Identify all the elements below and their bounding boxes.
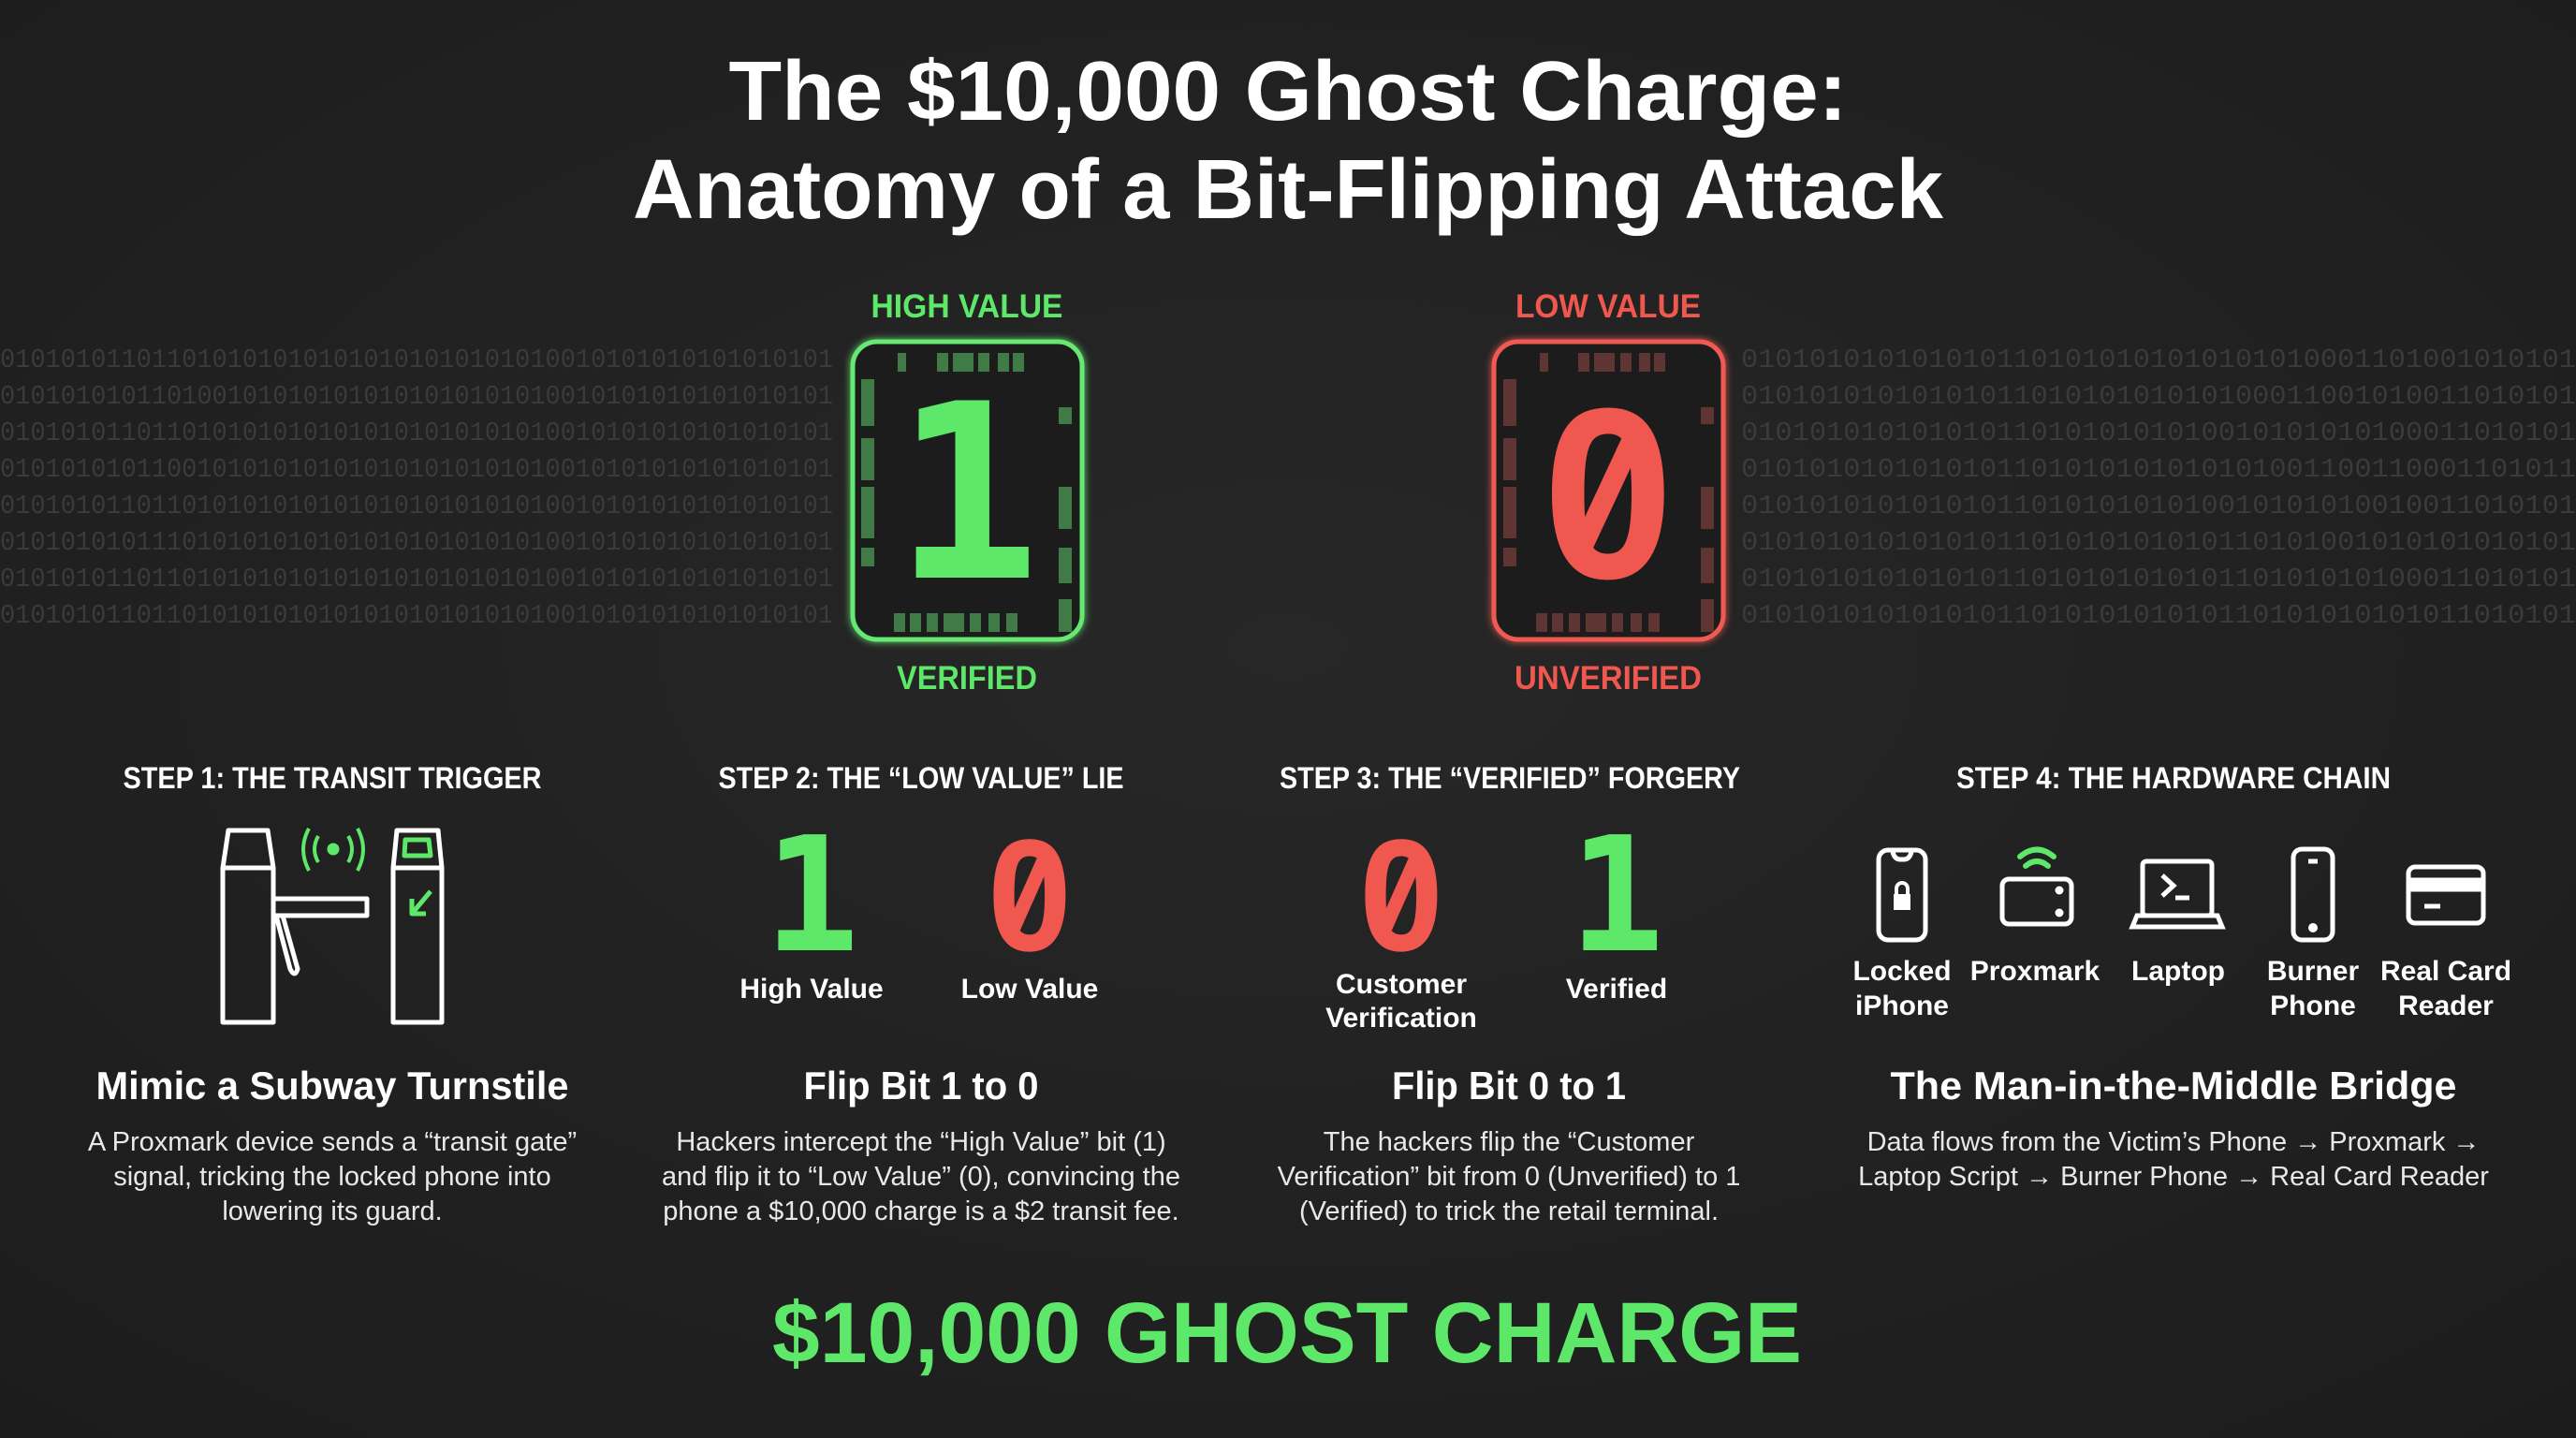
binary background right: 0101010101010101101010101010110101010100011010101 (1741, 564, 2576, 594)
panel: low value bit: LOW VALUE (1515, 288, 1701, 325)
body text: and flip it to “Low Value” (0), convincing the (662, 1162, 1180, 1192)
body text: Data flows from the Victim’s Phone → Proxmark → (1867, 1127, 2480, 1157)
body text: (Verified) to trick the retail terminal. (1299, 1196, 1719, 1226)
step 3 bits: 0 (1359, 807, 1443, 985)
body text: Hackers intercept the “High Value” bit (1) (676, 1127, 1166, 1157)
step headings: STEP 2: THE “LOW VALUE” LIE (719, 761, 1123, 795)
icon: turnstile (223, 829, 442, 1022)
panel: high value bit (853, 288, 1082, 697)
step 3 bits: Verification (1325, 1003, 1477, 1034)
binary background right: 0101010101010101101010101010101010001101001010101 (1741, 345, 2576, 375)
step 4 hardware chain icons (1852, 849, 2511, 1021)
panel: high value bit: VERIFIED (897, 660, 1037, 697)
binary background right: 0101010101010101101010101010101001100110001101011 (1741, 454, 2576, 485)
step 3 bits (1325, 803, 1667, 1034)
step 4 hardware chain icons: Phone (2270, 990, 2356, 1021)
body text: phone a $10,000 charge is a $2 transit fee. (663, 1196, 1179, 1226)
binary background right: 0101010101010101101010101010110101010101011010101 (1741, 600, 2576, 631)
step 3 bits: Customer (1336, 969, 1467, 1000)
panel: high value bit: HIGH VALUE (871, 288, 1063, 325)
body text: lowering its guard. (222, 1196, 443, 1226)
subheadings: Mimic a Subway Turnstile (95, 1064, 569, 1108)
binary background left: 0101010101101001010101010101010101010010101010101010101 (0, 381, 833, 412)
step 2 bits: 0 (988, 807, 1072, 985)
binary background left: 0101010101110101010101010101010101010010101010101010101 (0, 527, 833, 558)
step headings: STEP 1: THE TRANSIT TRIGGER (124, 761, 541, 795)
subheadings: The Man-in-the-Middle Bridge (1891, 1064, 2456, 1108)
binary background right (1741, 345, 2576, 631)
binary background left: 0101010110110101010101010101010101010010101010101010101 (0, 418, 833, 448)
title: Anatomy of a Bit-Flipping Attack (633, 143, 1944, 237)
step 4 hardware chain icons: Proxmark (1970, 956, 2100, 987)
step headings: STEP 4: THE HARDWARE CHAIN (1956, 761, 2391, 795)
binary background left: 0101010110110101010101010101010101010010101010101010101 (0, 491, 833, 521)
subheadings: Flip Bit 1 to 0 (803, 1064, 1039, 1108)
icon: locked iphone (1879, 850, 1925, 940)
body text: Laptop Script → Burner Phone → Real Card Reader (1858, 1162, 2489, 1192)
icon: burner phone (2293, 849, 2333, 940)
step 4 hardware chain icons: Locked (1852, 956, 1952, 987)
binary background right: 0101010101010101101010101010100011001010011010101 (1741, 381, 2576, 412)
binary background left: 0101010110110101010101010101010101010010101010101010101 (0, 600, 833, 631)
binary background right: 0101010101010101101010101010010101010010011010101 (1741, 491, 2576, 521)
binary background right: 0101010101010101101010101010110101001010101010101 (1741, 527, 2576, 558)
body text: A Proxmark device sends a “transit gate” (88, 1127, 577, 1157)
binary background left: 0101010110110101010101010101010101010010101010101010101 (0, 345, 833, 375)
binary background right: 0101010101010101101010101010010101010100011010101 (1741, 418, 2576, 448)
step 3 bits: Verified (1566, 974, 1667, 1005)
icon: proxmark (2002, 850, 2071, 924)
panel: low value bit (1494, 288, 1723, 697)
panel: high value bit: 1 (894, 353, 1040, 636)
icon: card reader (2408, 867, 2483, 923)
step 2 bits: High Value (739, 974, 884, 1005)
panel: low value bit: 0 (1543, 359, 1674, 630)
binary background left: 0101010101100101010101010101010101010010101010101010101 (0, 454, 833, 485)
step 4 hardware chain icons: Laptop (2131, 956, 2225, 987)
body text (88, 1127, 2489, 1226)
panel: low value bit: UNVERIFIED (1515, 660, 1702, 697)
step headings: STEP 3: THE “VERIFIED” FORGERY (1280, 761, 1740, 795)
binary background left: 0101010110110101010101010101010101010010101010101010101 (0, 564, 833, 594)
step 4 hardware chain icons: iPhone (1855, 990, 1949, 1021)
step 4 hardware chain icons: Real Card (2380, 956, 2511, 987)
body text: The hackers flip the “Customer (1324, 1127, 1695, 1157)
step 4 hardware chain icons: Burner (2267, 956, 2359, 987)
subheadings: Flip Bit 0 to 1 (1392, 1064, 1626, 1108)
icon: laptop (2132, 861, 2222, 927)
step 3 bits: 1 (1569, 803, 1664, 989)
step 2 bits (739, 803, 1098, 1005)
body text: Verification” bit from 0 (Unverified) to 1 (1278, 1162, 1740, 1192)
step 2 bits: 1 (764, 803, 859, 989)
binary background left (0, 345, 833, 631)
body text: signal, tricking the locked phone into (113, 1162, 551, 1192)
bottom callout: $10,000 GHOST CHARGE (772, 1285, 1802, 1381)
step 2 bits: Low Value (961, 974, 1098, 1005)
title (633, 45, 1944, 237)
step 4 hardware chain icons: Reader (2398, 990, 2494, 1021)
subheadings (95, 1064, 2456, 1108)
title: The $10,000 Ghost Charge: (728, 45, 1847, 139)
step headings (124, 761, 2391, 795)
